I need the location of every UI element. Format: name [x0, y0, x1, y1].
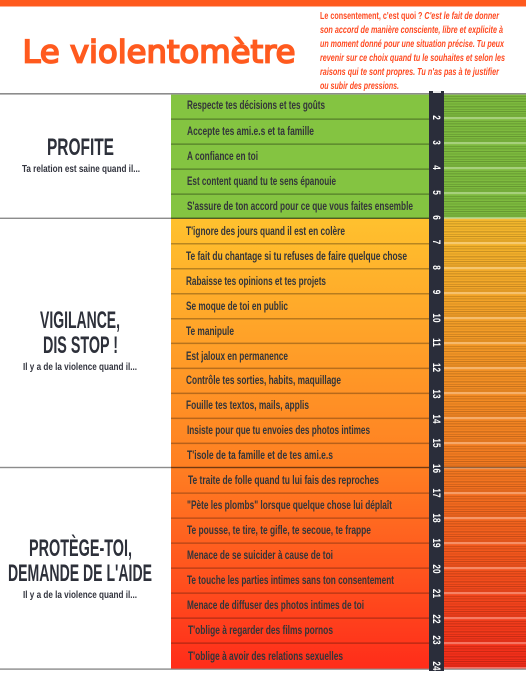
thermometer scale: 14 [430, 414, 442, 424]
thermometer scale [429, 91, 444, 671]
behaviour list: green rows: Respecte tes décisions et tes goûts [187, 100, 325, 112]
thermometer scale: 23 [430, 635, 442, 645]
thermometer scale: 4 [430, 165, 442, 170]
thermometer scale: 22 [430, 614, 442, 624]
thermometer scale: 3 [430, 140, 442, 145]
thermometer scale: 5 [430, 190, 442, 195]
panel: protège-toi heading: Il y a de la violence quand il... [23, 589, 137, 601]
behaviour list: danger rows: Te traite de folle quand tu lui fais des reproches [188, 475, 379, 487]
behaviour list: vigilance rows: Te manipule [186, 326, 234, 338]
behaviour list: danger rows: T'oblige à avoir des relations sexuelles [188, 651, 343, 663]
behaviour list: danger rows: Te touche les parties intimes sans ton consentement [187, 575, 394, 587]
title: Le violentomètre [22, 34, 296, 70]
orange to red zone background [171, 219, 429, 669]
panel: protège-toi heading: DEMANDE DE L'AIDE [8, 560, 152, 587]
behaviour list: danger rows: T'oblige à regarder des films pornos [188, 625, 333, 637]
behaviour list: vigilance rows: Rabaisse tes opinions et tes projets [186, 276, 326, 288]
behaviour list: vigilance rows: Se moque de toi en public [186, 301, 288, 313]
thermometer scale: 10 [430, 313, 442, 323]
behaviour list: vigilance rows: Insiste pour que tu envoies des photos intimes [187, 425, 370, 437]
panel: profite heading: Ta relation est saine quand il... [22, 163, 140, 175]
top orange bar [0, 0, 526, 6]
panel: protège-toi heading [8, 534, 152, 601]
behaviour list: green rows: A confiance en toi [187, 151, 258, 163]
consent definition text: ou subir des pressions. [320, 80, 399, 92]
thermometer scale: 9 [430, 290, 442, 295]
behaviour list: green rows [187, 100, 413, 213]
panel: profite heading: PROFITE [47, 134, 114, 161]
thermometer scale: 7 [430, 240, 442, 244]
thermometer scale: 2 [430, 115, 442, 120]
behaviour list: danger rows: "Pète les plombs" lorsque quelque chose lui déplaît [187, 500, 392, 512]
panel: vigilance heading [23, 307, 137, 373]
panel: profite heading [22, 134, 140, 175]
behaviour list: danger rows: Menace de diffuser des photos intimes de toi [187, 600, 364, 612]
behaviour list: green rows: Est content quand tu te sens épanouie [187, 176, 336, 188]
thermometer scale: 16 [430, 464, 442, 474]
thermometer scale: 17 [430, 488, 442, 498]
thermometer scale: 8 [430, 265, 442, 270]
thermometer scale: 21 [430, 589, 442, 599]
thermometer scale: 24 [430, 661, 442, 671]
consent definition text [320, 10, 505, 92]
thermometer scale: 13 [430, 389, 442, 399]
thermometer scale: 12 [430, 363, 442, 373]
behaviour list: danger rows: Menace de se suicider à cause de toi [187, 550, 333, 562]
behaviour list: vigilance rows: Est jaloux en permanence [186, 351, 288, 363]
behaviour list: vigilance rows: Contrôle tes sorties, habits, maquillage [186, 375, 341, 387]
behaviour list: vigilance rows: T'isole de ta famille et de tes ami.e.s [187, 450, 333, 462]
behaviour list: vigilance rows: Te fait du chantage si tu refuses de faire quelque chose [186, 251, 407, 263]
thermometer scale: 19 [430, 538, 442, 548]
behaviour list: vigilance rows: Fouille tes textos, mails, applis [186, 400, 309, 412]
behaviour list: green rows: S'assure de ton accord pour ce que vous faites ensemble [187, 201, 413, 213]
row dividers [171, 118, 429, 644]
behaviour list: vigilance rows: T'ignore des jours quand il est en colère [186, 226, 345, 238]
panel: vigilance heading: VIGILANCE, [40, 307, 120, 334]
behaviour list: green rows: Accepte tes ami.e.s et ta famille [187, 126, 314, 138]
behaviour list: vigilance rows [186, 226, 407, 462]
thermometer stripes [444, 95, 526, 669]
thermometer scale: 11 [430, 338, 442, 347]
panel: protège-toi heading: PROTÈGE-TOI, [29, 534, 132, 562]
thermometer scale: 18 [430, 513, 442, 523]
thermometer scale: 15 [430, 438, 442, 448]
behaviour list: danger rows: Te pousse, te tire, te gifle, te secoue, te frappe [187, 525, 371, 537]
panel: vigilance heading: Il y a de la violence quand il... [23, 361, 137, 373]
behaviour list: danger rows [187, 475, 394, 663]
green zone background [171, 95, 429, 219]
panel: vigilance heading: DIS STOP ! [43, 332, 118, 359]
thermometer scale: 6 [430, 215, 442, 220]
thermometer scale: 20 [430, 564, 442, 574]
